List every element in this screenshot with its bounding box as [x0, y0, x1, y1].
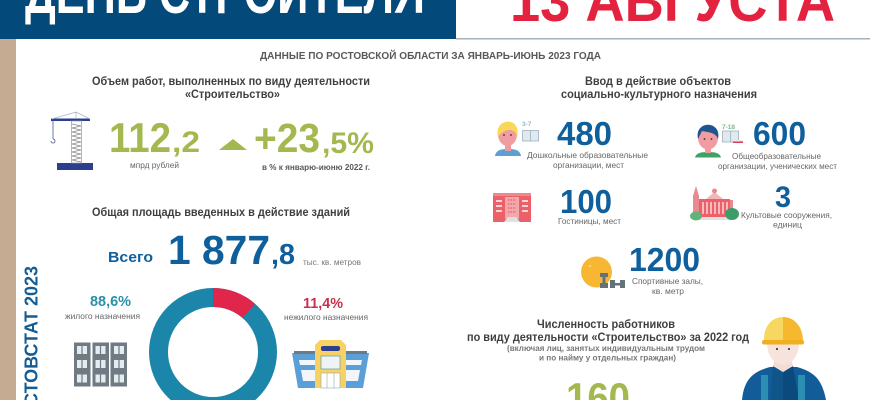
- stat: cultural: Культовые сооружения,: [741, 210, 832, 220]
- icon: school child: 7-18: [722, 124, 735, 131]
- stat: total: 1 877: [168, 227, 270, 273]
- stat: preschool: Дошкольные образовательные: [527, 150, 648, 160]
- stat: sports halls: Спортивные залы,: [632, 276, 703, 286]
- heading: facilities: Ввод в действие объектов: [585, 76, 731, 88]
- stat: hotels: 100: [560, 183, 612, 220]
- heading: number of workers: по виду деятельности «Строительство» за 2022 год: [467, 332, 750, 344]
- stat: cultural: [741, 181, 832, 230]
- stat: preschool: организации, мест: [553, 160, 624, 170]
- stat: +23,5%: ,5%: [322, 127, 374, 160]
- label: non-residential: 11,4%: [303, 295, 343, 312]
- label: residential: [65, 293, 140, 321]
- left beige side bar: [0, 39, 16, 400]
- note: included persons: [507, 343, 705, 362]
- panel: workers: [467, 317, 826, 400]
- stat: 112,2: мпрд рублей: [130, 161, 179, 170]
- heading: volume of works: «Строительство»: [185, 89, 280, 101]
- icon: preschool child: 3-7: [522, 121, 532, 128]
- heading: number of workers: Численность работников: [537, 319, 675, 331]
- stat: 112,2: 112: [109, 114, 171, 161]
- icon: museum: [690, 186, 739, 220]
- stat: total: Всего: [108, 249, 153, 266]
- stat: +23,5%: [254, 115, 374, 172]
- panel: total area: [65, 207, 369, 400]
- header band with title: [0, 0, 870, 40]
- stat: hotels: Гостиницы, мест: [558, 216, 621, 226]
- heading: volume of works: Объем работ, выполненных по виду деятельности: [92, 76, 370, 88]
- icon: school child: [695, 124, 743, 158]
- heading: facilities: социально-культурного назначения: [561, 89, 757, 101]
- label: non-residential: [284, 295, 368, 322]
- icon: crane: [51, 112, 93, 170]
- icon: shopping centre: [292, 340, 369, 388]
- note: included persons: и по найму у отдельных граждан): [539, 352, 676, 362]
- stat: +23,5%: в % к январю-июню 2022 г.: [262, 163, 370, 172]
- subtitle: ДАННЫЕ ПО РОСТОВСКОЙ ОБЛАСТИ ЗА ЯНВАРЬ-ИЮНЬ 2023 ГОДА: [260, 49, 601, 62]
- heading: number of workers: [467, 319, 750, 344]
- label: residential: жилого назначения: [65, 311, 140, 321]
- panel: construction volume: [51, 76, 374, 172]
- stat: total: [108, 227, 361, 273]
- heading: facilities: [561, 76, 757, 101]
- panel: social and cultural facilities: [493, 76, 837, 296]
- stat: sports halls: 1200: [629, 241, 700, 278]
- stat: total: ,8: [271, 239, 295, 271]
- stat: schools: Общеобразовательные: [732, 151, 821, 161]
- stat: schools: 600: [753, 115, 806, 152]
- icon: preschool child: [495, 121, 538, 156]
- note: included persons: (включая лиц, занятых индивидуальным трудом: [507, 343, 705, 353]
- stat: sports halls: кв. метр: [652, 286, 684, 296]
- stat: schools: [718, 115, 837, 171]
- icon: hotel: [493, 193, 531, 222]
- heading: volume of works: [92, 76, 370, 101]
- label: non-residential: нежилого назначения: [284, 312, 368, 322]
- stat: +23,5%: +23: [254, 115, 320, 161]
- icon: ball and dumbbells: [581, 256, 625, 288]
- stat: 112,2: [109, 114, 200, 170]
- icon: apartment building: [74, 342, 127, 386]
- stat: total: тыс. кв. метров: [303, 258, 361, 267]
- heading: total area: Общая площадь введенных в действие зданий: [92, 207, 350, 219]
- stat: cultural: единиц: [773, 220, 802, 230]
- stat: sports halls: [629, 241, 703, 296]
- stat: 112,2: ,2: [172, 126, 200, 159]
- stat: cultural: 3: [775, 181, 791, 214]
- label: residential: 88,6%: [90, 293, 131, 310]
- arrow: up triangle: [219, 139, 247, 150]
- icon: builder: [742, 317, 826, 400]
- donut chart: [158, 288, 268, 400]
- stat: preschool: [527, 115, 648, 170]
- stat: schools: организации, ученических мест: [718, 161, 837, 171]
- stat: preschool: 480: [557, 115, 612, 152]
